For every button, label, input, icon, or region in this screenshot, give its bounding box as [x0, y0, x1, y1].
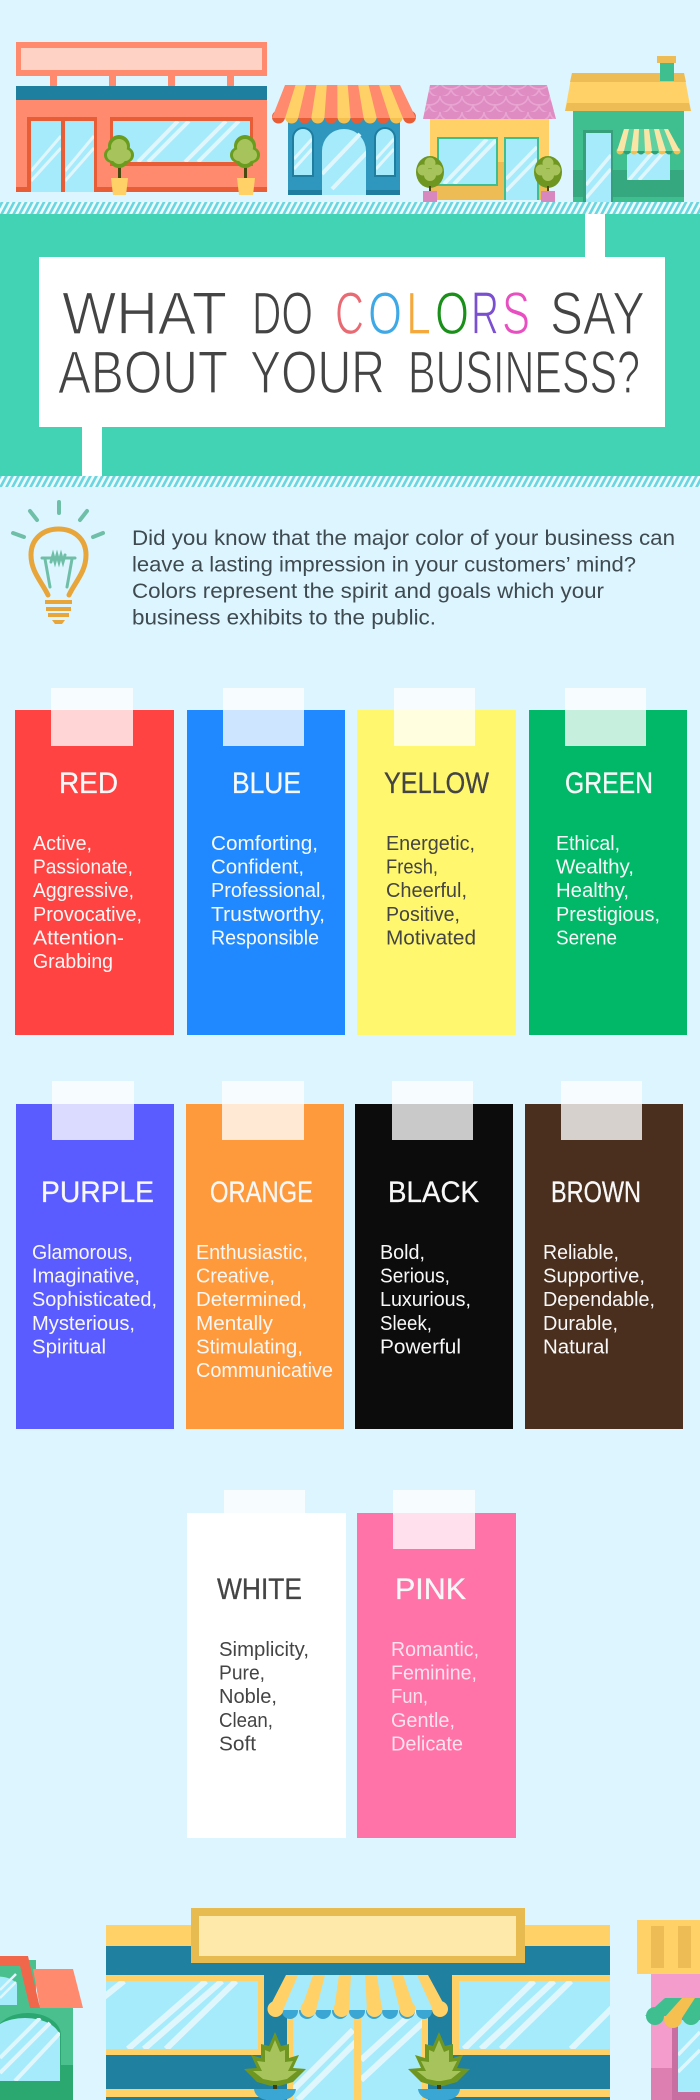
heading: BROWN	[551, 1176, 641, 1209]
heading: PINK	[395, 1573, 466, 1606]
traits: Serious,	[380, 1265, 450, 1288]
card	[355, 1104, 513, 1429]
traits: Soft	[219, 1732, 256, 1755]
title: second line	[58, 339, 640, 406]
panel: blue	[187, 688, 345, 1035]
title: first line: DO	[252, 280, 313, 347]
title: first line: SAY	[550, 280, 645, 347]
card	[529, 710, 687, 1035]
sign post: top	[585, 214, 605, 258]
card	[187, 710, 345, 1035]
panel: black	[355, 1081, 513, 1429]
traits: Serene	[556, 926, 617, 949]
illustration: bottom row of shops	[0, 1908, 700, 2100]
panel: brown	[525, 1081, 683, 1429]
intro text: leave a lasting impression in your customers’ mind?	[132, 554, 636, 576]
panel: purple	[16, 1081, 174, 1429]
traits: Noble,	[219, 1685, 277, 1708]
traits: Powerful	[380, 1335, 461, 1358]
title: first line: WHAT	[62, 280, 227, 347]
panel: yellow	[357, 688, 516, 1035]
heading: BLACK	[388, 1176, 479, 1209]
traits: Wealthy,	[556, 856, 634, 879]
tape	[224, 1490, 305, 1549]
traits	[386, 832, 476, 949]
traits	[196, 1241, 333, 1382]
tape	[392, 1081, 473, 1140]
traits: Grabbing	[33, 950, 113, 973]
title: first line: R	[471, 280, 499, 347]
traits: Aggressive,	[33, 879, 134, 902]
shop: pink, cropped at right	[637, 1920, 700, 2100]
shop: blue with striped awning	[272, 85, 416, 195]
traits: Gentle,	[391, 1709, 455, 1732]
teal header band	[0, 214, 700, 476]
traits: Trustworthy,	[211, 903, 325, 926]
traits: Supportive,	[543, 1265, 645, 1288]
intro text: business exhibits to the public.	[132, 606, 436, 630]
traits: Confident,	[211, 856, 304, 879]
tape	[222, 1081, 304, 1140]
traits: Mysterious,	[32, 1312, 135, 1335]
traits: Mentally	[196, 1312, 274, 1335]
traits: Active,	[33, 832, 92, 855]
intro text: Did you know that the major color of your business can	[132, 527, 675, 550]
shop: yellow with pink scalloped roof	[416, 85, 562, 202]
title: second line: ABOUT	[58, 339, 228, 406]
traits: Communicative	[196, 1359, 333, 1382]
traits: Durable,	[543, 1312, 618, 1335]
traits: Luxurious,	[380, 1288, 471, 1311]
shop: salmon storefront	[16, 42, 267, 195]
traits: Ethical,	[556, 832, 620, 855]
traits: Clean,	[219, 1709, 273, 1732]
card	[357, 710, 516, 1035]
hatched ground strip: top	[0, 202, 700, 214]
traits: Healthy,	[556, 879, 629, 902]
heading: GREEN	[565, 767, 653, 800]
traits: Pure,	[219, 1662, 265, 1685]
tape	[394, 688, 475, 746]
tape	[561, 1081, 642, 1140]
panel: green	[529, 688, 687, 1035]
traits: Glamorous,	[32, 1241, 133, 1264]
traits: Delicate	[391, 1732, 463, 1755]
heading: RED	[59, 767, 118, 800]
title: first line: C	[335, 280, 364, 347]
shop: green, cropped at left	[0, 1956, 83, 2100]
tape	[51, 688, 133, 746]
traits: Attention-	[33, 926, 124, 949]
tape	[393, 1490, 475, 1549]
intro text: Colors represent the spirit and goals which your	[132, 580, 604, 603]
icon: light bulb	[13, 502, 103, 624]
heading: ORANGE	[210, 1176, 313, 1209]
traits: Reliable,	[543, 1241, 619, 1264]
traits: Fresh,	[386, 856, 438, 879]
traits: Provocative,	[33, 903, 142, 926]
panel: pink	[357, 1490, 516, 1838]
traits	[33, 832, 142, 973]
traits	[211, 832, 326, 949]
card	[186, 1104, 344, 1429]
panel: orange	[186, 1081, 344, 1429]
title: second line: YOUR	[250, 339, 385, 406]
traits: Energetic,	[386, 832, 475, 855]
traits: Spiritual	[32, 1335, 106, 1358]
panel: white	[187, 1490, 346, 1838]
card	[525, 1104, 683, 1429]
panel: red	[15, 688, 174, 1035]
traits: Feminine,	[391, 1662, 477, 1685]
traits: Sleek,	[380, 1312, 432, 1335]
tape	[52, 1081, 134, 1140]
tape	[223, 688, 304, 746]
card	[15, 710, 174, 1035]
card	[357, 1513, 516, 1838]
heading: BLUE	[232, 767, 301, 800]
traits: Passionate,	[33, 856, 133, 879]
title sign	[39, 257, 665, 427]
hatched ground strip: bottom	[0, 476, 700, 487]
traits: Dependable,	[543, 1288, 655, 1311]
traits	[380, 1241, 471, 1358]
traits: Romantic,	[391, 1638, 479, 1661]
title: first line	[62, 280, 645, 347]
heading: PURPLE	[41, 1176, 154, 1209]
traits: Bold,	[380, 1241, 425, 1264]
shop: large blue and yellow storefront	[104, 1908, 619, 2100]
title: first line: S	[502, 280, 530, 347]
plant: right	[408, 2032, 470, 2100]
traits	[556, 832, 660, 949]
tape	[565, 688, 646, 746]
traits: Fun,	[391, 1685, 428, 1708]
shop: green with yellow roof	[565, 56, 691, 202]
traits: Sophisticated,	[32, 1288, 157, 1311]
heading: YELLOW	[384, 767, 490, 800]
traits	[219, 1638, 309, 1755]
traits: Prestigious,	[556, 903, 660, 926]
traits: Professional,	[211, 879, 326, 902]
traits: Comforting,	[211, 832, 318, 855]
title: first line: O	[368, 280, 402, 347]
traits: Cheerful,	[386, 879, 467, 902]
sign board	[39, 257, 665, 427]
sign post: bottom	[82, 426, 102, 476]
traits: Natural	[543, 1335, 609, 1358]
traits: Positive,	[386, 903, 460, 926]
traits	[543, 1241, 655, 1358]
card	[16, 1104, 174, 1429]
title: first line: O	[435, 280, 469, 347]
illustration: top row of shops	[16, 42, 691, 202]
card	[187, 1513, 346, 1838]
traits: Simplicity,	[219, 1638, 309, 1661]
intro text	[132, 527, 675, 630]
heading: WHITE	[217, 1573, 302, 1606]
traits: Responsible	[211, 926, 319, 949]
traits	[391, 1638, 479, 1755]
plant: left	[244, 2032, 306, 2100]
traits: Creative,	[196, 1265, 275, 1288]
traits	[32, 1241, 157, 1358]
traits: Motivated	[386, 926, 476, 949]
title: first line: L	[406, 280, 431, 347]
traits: Determined,	[196, 1288, 307, 1311]
traits: Stimulating,	[196, 1335, 303, 1358]
traits: Imaginative,	[32, 1265, 140, 1288]
traits: Enthusiastic,	[196, 1241, 308, 1264]
